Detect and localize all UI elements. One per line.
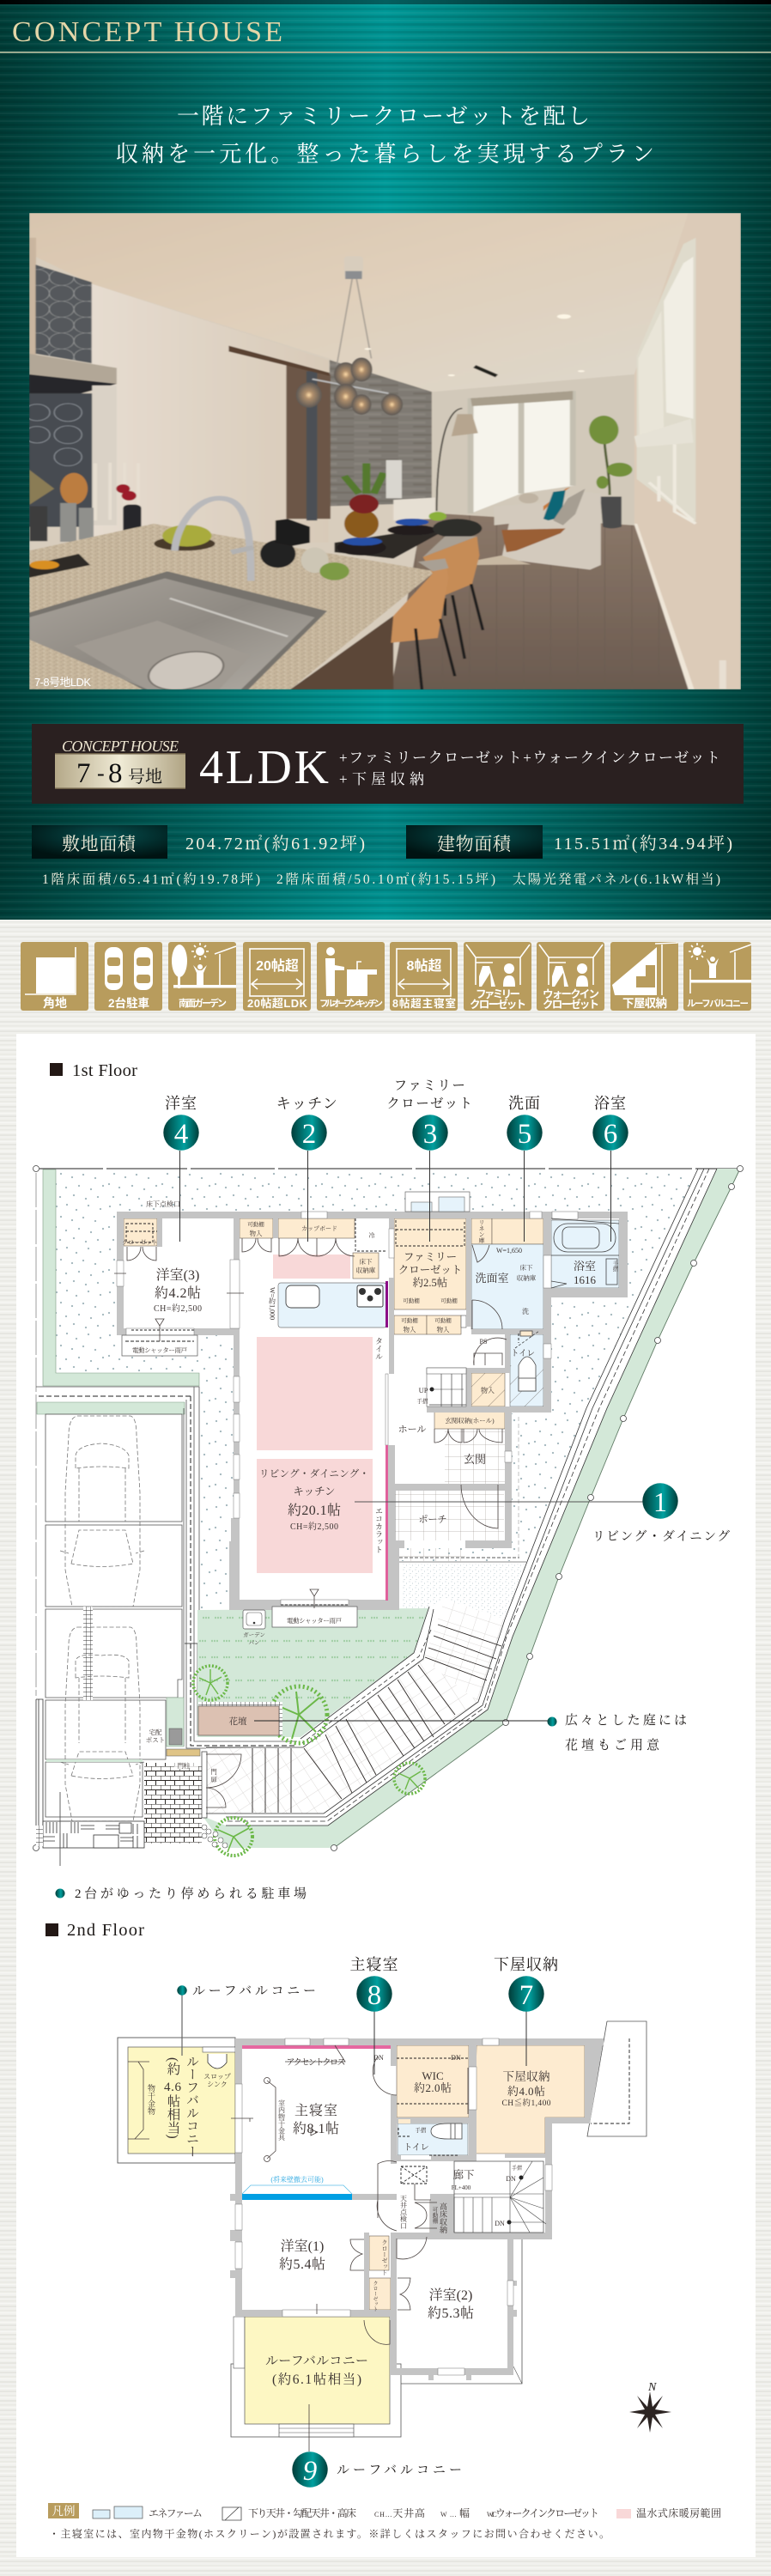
- gate pavers: 門柱: [177, 1761, 191, 1770]
- room labels: 玄関収納(ホール): [445, 1416, 495, 1425]
- stairs: [454, 2161, 546, 2233]
- callout 9: ルーフバルコニー: ルーフバルコニー: [337, 2464, 462, 2477]
- callout 2: キッチン: [276, 1096, 338, 1242]
- callout 2: キッチン: 2: [302, 1119, 316, 1150]
- icon: family closet: ファミリー: [476, 988, 520, 1000]
- room fills: [124, 1218, 619, 1429]
- label: building area: [406, 825, 543, 859]
- garden pan: パン: [249, 1639, 259, 1646]
- heading: 2nd Floor: 2nd Floor: [67, 1921, 144, 1940]
- text: floor areas and solar: [42, 872, 720, 887]
- callout 7: 下屋収納: [494, 1956, 559, 2066]
- callout 7: 下屋収納: 7: [519, 1980, 533, 2011]
- badge: lot number: [55, 753, 185, 789]
- icon: corner lot: [21, 942, 88, 1011]
- site: approach path: [206, 1169, 717, 1826]
- icon: LDK over 20 tatami: 20帖超: [256, 958, 299, 974]
- gate pavers: [144, 1761, 202, 1844]
- room labels: 1616: [574, 1273, 596, 1286]
- callout 5: 洗面: 5: [518, 1119, 531, 1150]
- room labels: 可動棚: [247, 1220, 264, 1228]
- vertical labels: [276, 2099, 447, 2312]
- icon: south garden: [168, 942, 236, 1011]
- label: concept house: CONCEPT HOUSE: [62, 738, 179, 755]
- vertical labels: リネン庫: [478, 1219, 485, 1244]
- room labels: 可動棚: [440, 1297, 458, 1304]
- icon: walk-in closet: クローゼット: [543, 998, 599, 1011]
- outer eave: [587, 2021, 647, 2136]
- site: lawn: [197, 1608, 428, 1737]
- room labels: PS: [480, 1338, 487, 1346]
- room labels: 約5.3帖: [428, 2306, 474, 2321]
- badge: lot number: 7: [76, 758, 91, 789]
- site: boundary markers: [33, 1166, 744, 1851]
- trees: [193, 1666, 425, 1856]
- icon: walk-in closet: ウォークイン: [543, 988, 599, 1000]
- vertical labels: クローゼット: [381, 2239, 388, 2275]
- gate: 扉: [210, 1776, 217, 1783]
- icon: family closet: クローゼット: [470, 998, 526, 1011]
- room labels: 約4.0帖: [507, 2085, 545, 2098]
- callouts: first floor: [55, 1078, 730, 1901]
- pendant lamp: [344, 256, 363, 278]
- gate: 門: [210, 1768, 217, 1776]
- room labels: CH=約2,500: [154, 1303, 202, 1314]
- callout 7: 下屋収納: 下屋収納: [494, 1956, 559, 1973]
- lower roof balcony: (約6.1帖相当): [272, 2372, 361, 2387]
- room labels: 下屋収納: [503, 2070, 549, 2083]
- triangle marks: [114, 1273, 319, 1608]
- room labels: ファミリー: [404, 1251, 457, 1263]
- floor lamp: [437, 409, 462, 511]
- room labels: CH=約2,500: [290, 1521, 338, 1532]
- room labels: 洋室(3): [156, 1267, 199, 1283]
- callout 6: 浴室: [592, 1095, 628, 1242]
- callout 4: 洋室: 4: [174, 1119, 188, 1150]
- room labels: 洋室(2): [429, 2287, 472, 2303]
- room labels: リビング・ダイニング・: [259, 1468, 369, 1479]
- room labels: 洋室(1): [281, 2239, 324, 2254]
- rain shutters: 電動シャッター雨戸: [287, 1616, 342, 1625]
- callout 1: リビング・ダイニング: [355, 1483, 730, 1544]
- room labels: ポーチ: [419, 1514, 446, 1525]
- outdoor unit: [405, 1192, 470, 1212]
- eave lower right: [401, 2239, 522, 2384]
- room labels: 可動棚: [401, 1316, 418, 1324]
- garden pan: ガーデン: [243, 1631, 265, 1638]
- room labels: 約5.4帖: [279, 2257, 325, 2272]
- lower roof balcony: [231, 2317, 401, 2437]
- balcony: upper roof balcony: ルーフバルコニー: [185, 2055, 199, 2158]
- vertical labels: W=約1,000: [268, 1287, 276, 1320]
- icon: bedroom over 8 tatami: [390, 942, 458, 1011]
- room labels: 物入: [481, 1386, 495, 1394]
- walls: [230, 2038, 604, 2380]
- callout 6: 浴室: 6: [604, 1119, 617, 1150]
- panel: floor plan white card: [16, 1034, 756, 2557]
- badge: lot number: 号地: [128, 767, 162, 787]
- room labels: [270, 2054, 551, 2321]
- entrance tiles: [445, 1429, 505, 1484]
- room labels: 床下: [359, 1257, 373, 1266]
- legend: [48, 2503, 721, 2520]
- room labels: ホール: [398, 1425, 426, 1435]
- legend: WIC ウォークインクローゼット: [487, 2507, 599, 2519]
- icon: open kitchen: [317, 942, 385, 1011]
- stones: [202, 1825, 228, 1848]
- callout 8: 主寝室: [350, 1956, 398, 2075]
- photo caption: 7-8号地LDK: [34, 676, 91, 689]
- room labels: 浴室: [574, 1260, 596, 1273]
- text: floor areas and solar: 太陽光発電パネル(6.1kW相当): [513, 872, 720, 887]
- callout: flower bed garden: 広々とした庭には: [565, 1713, 687, 1728]
- stairs: UP: [419, 1386, 428, 1394]
- balcony: upper roof balcony: スロップ: [203, 2073, 231, 2081]
- rooms: [242, 2045, 585, 2310]
- layout: 4LDK: 4LDK: [199, 741, 329, 794]
- room labels: キッチン: [293, 1485, 336, 1498]
- callout 2: キッチン: キッチン: [276, 1096, 338, 1112]
- kitchen counter: [278, 1283, 386, 1327]
- lower roof balcony: ルーフバルコニー: [265, 2354, 368, 2368]
- parking: paver strip: [83, 1607, 93, 1700]
- sofa: [495, 492, 601, 570]
- icon: corner lot: 角地: [43, 996, 67, 1010]
- icon: roof balcony: [683, 942, 751, 1011]
- label: building area: 建物面積: [437, 834, 513, 854]
- room: floor heating: [257, 1255, 373, 1573]
- value: building area: 115.51㎡(約34.94坪): [554, 834, 732, 854]
- building: first floor: [114, 1192, 628, 1646]
- callout: roof balcony upper: ルーフバルコニー: [192, 1984, 316, 1998]
- room labels: 床下: [520, 1263, 533, 1272]
- icon: north compass: [629, 2381, 671, 2433]
- room labels: アクセントクロス: [287, 2057, 345, 2068]
- vertical labels: [268, 1219, 618, 1553]
- balcony: upper roof balcony: 帖相当): [165, 2094, 180, 2139]
- site: property lines: [39, 1168, 738, 1170]
- vertical labels: クローゼット: [372, 2280, 378, 2312]
- panel: teal hero background: [0, 0, 771, 920]
- room labels: 物入: [249, 1229, 263, 1237]
- callout 5: 洗面: [507, 1095, 543, 1242]
- room labels: W=1,650: [496, 1247, 522, 1255]
- windows: [117, 1212, 578, 1605]
- stairs: 手摺: [417, 1397, 428, 1405]
- callout 5: 洗面: 洗面: [508, 1095, 541, 1112]
- legend: 下り天井・勾配天井・高床: [248, 2506, 356, 2519]
- room labels: 約2.0帖: [414, 2081, 452, 2094]
- balcony: upper roof balcony: 4.6: [164, 2081, 182, 2094]
- callout 3: ファミリークローゼット: 3: [423, 1119, 437, 1150]
- callout 9: ルーフバルコニー: 9: [303, 2456, 317, 2487]
- vertical labels: エコカラット: [374, 1507, 383, 1553]
- flower bed: [198, 1702, 282, 1735]
- room labels: 物入: [436, 1325, 450, 1334]
- vertical labels: タイル: [374, 1337, 383, 1360]
- room labels: クローゼット: [398, 1264, 462, 1276]
- callout 1: リビング・ダイニング: リビング・ダイニング: [592, 1529, 730, 1544]
- legend title: [48, 2503, 79, 2518]
- icon: LDK over 20 tatami: 20帖超LDK: [247, 997, 308, 1010]
- room labels: 主寝室: [294, 2102, 337, 2118]
- icon: open kitchen: フルオープンキッチン: [319, 999, 383, 1009]
- room labels: DN: [451, 2054, 461, 2062]
- callout 3: ファミリークローゼット: [386, 1078, 474, 1242]
- stairs: [417, 1368, 466, 1406]
- rain shutters: 電動シャッター雨戸: [132, 1346, 187, 1354]
- icon: bedroom over 8 tatami: 8帖超: [407, 958, 441, 974]
- rain shutters: [122, 1335, 357, 1627]
- floor plan: first floor: [33, 1166, 744, 1856]
- room labels: 収納庫: [356, 1266, 376, 1274]
- room labels: 床下点検口: [146, 1200, 180, 1208]
- label: site area: [32, 825, 167, 859]
- room labels: クローゼット: [122, 1239, 158, 1246]
- room labels: [122, 1200, 596, 1532]
- icon: roof balcony: ルーフバルコニー: [687, 999, 749, 1009]
- doors: [127, 1238, 507, 1528]
- room labels: 約2.5帖: [413, 1276, 447, 1289]
- callout 6: 浴室: 浴室: [594, 1095, 627, 1112]
- legend: エネファーム: [149, 2507, 203, 2519]
- stairs: DN: [506, 2175, 516, 2183]
- stairs: 手摺: [512, 2165, 522, 2172]
- legend: CH…天井高: [374, 2506, 425, 2519]
- room labels: 洗: [522, 1307, 529, 1315]
- side windows: [637, 238, 695, 524]
- balcony: upper roof balcony: [118, 2038, 235, 2163]
- icon: attic storage: 下屋収納: [622, 996, 667, 1010]
- text: plan additions: +ファミリークローゼット+ウォークインクローゼット: [339, 750, 720, 766]
- delivery box: ポスト: [146, 1736, 165, 1744]
- stairs: DN: [495, 2220, 505, 2227]
- toilet: [515, 1331, 539, 1391]
- icon: walk-in closet: [537, 942, 604, 1011]
- callout: parking: 2台がゆったり停められる駐車場: [75, 1886, 307, 1901]
- callout 8: 主寝室: 8: [367, 1980, 381, 2011]
- driveway pattern: [43, 1821, 144, 1848]
- icon: attic storage: [610, 942, 678, 1011]
- flower bed: 花壇: [228, 1716, 247, 1727]
- room labels: 手摺: [416, 2126, 427, 2134]
- site: gravel ground: [56, 1169, 698, 1610]
- parking: side line: [36, 1699, 43, 1826]
- icon: family closet: [464, 942, 531, 1011]
- text: plan additions: +下屋収納: [339, 771, 424, 787]
- room labels: 収納庫: [517, 1273, 537, 1282]
- site: east planting strip: [203, 1169, 740, 1848]
- legend title: 凡例: [52, 2505, 76, 2518]
- room labels: 約20.1帖: [288, 1503, 341, 1518]
- room labels: CH≦約1,400: [501, 2098, 551, 2108]
- room labels: (将来壁撤去可能): [270, 2175, 324, 2184]
- room labels: カップボード: [301, 1225, 337, 1232]
- dining table: [335, 524, 458, 559]
- icon: LDK over 20 tatami: [243, 942, 311, 1011]
- balcony: upper roof balcony: シンク: [207, 2081, 228, 2088]
- value: site area: 204.72㎡(約61.92坪): [185, 834, 365, 854]
- room labels: DN: [373, 2054, 384, 2062]
- fixtures: [231, 2045, 469, 2451]
- heading: 1st Floor: 1st Floor: [72, 1061, 137, 1080]
- legend: W… 幅: [440, 2506, 470, 2519]
- walls: [117, 1212, 628, 1610]
- note: ・主寝室には、室内物干金物(ホスクリーン)が設置されます。※詳しくはスタッフにお問い合わせください。: [49, 2527, 610, 2540]
- icon: two car parking: 2台駐車: [108, 996, 149, 1010]
- balcony: upper roof balcony: (約: [165, 2057, 180, 2075]
- room labels: 廊下: [452, 2168, 475, 2181]
- callout 3: ファミリークローゼット: ファミリー: [394, 1078, 466, 1093]
- counter: [29, 524, 435, 690]
- callout: flower bed garden: 花壇もご用意: [565, 1737, 660, 1753]
- room labels: 物入: [404, 1325, 416, 1334]
- callout 9: ルーフバルコニー: [292, 2451, 462, 2488]
- callout 8: 主寝室: 主寝室: [350, 1956, 398, 1973]
- room labels: 玄関: [464, 1453, 486, 1466]
- callout: flower bed garden: [254, 1713, 687, 1753]
- bathtub: [551, 1218, 619, 1288]
- title: plan headline: 一階にファミリークローゼットを配し: [177, 104, 590, 129]
- title: plan headline: [116, 104, 654, 167]
- gate: [202, 1752, 241, 1818]
- room labels: FL+400: [452, 2184, 471, 2191]
- text: floor areas and solar: 2階床面積/50.10㎡(約15.15坪): [276, 872, 495, 887]
- kitchen back: [29, 354, 117, 384]
- callout 4: 洋室: 洋室: [165, 1095, 197, 1112]
- badge: lot number: 8: [108, 758, 122, 789]
- room labels: WIC: [422, 2069, 444, 2082]
- panel: plan summary bar: [32, 724, 744, 804]
- icon: north compass: N: [647, 2381, 657, 2394]
- parking: car outlines: [60, 1416, 144, 1821]
- room labels: 約8.1帖: [293, 2121, 339, 2136]
- floor plan: second floor: [118, 2021, 647, 2451]
- title: plan headline: 収納を一元化。整った暮らしを実現するプラン: [116, 142, 654, 167]
- icon: bedroom over 8 tatami: 8帖超主寝室: [392, 997, 456, 1010]
- vertical labels: 天井点検口: [398, 2195, 407, 2230]
- heading: CONCEPT HOUSE: CONCEPT HOUSE: [12, 16, 282, 48]
- room labels: 約4.2帖: [155, 1285, 201, 1301]
- room labels: 冷: [369, 1231, 374, 1239]
- vertical labels: 室内物干金具: [276, 2099, 285, 2142]
- callout 4: 洋室: [163, 1095, 199, 1242]
- delivery box: [146, 1698, 184, 1747]
- icon: south garden: 南面ガーデン: [179, 997, 227, 1009]
- callout: parking: [55, 1792, 307, 1901]
- icon: two car parking: [94, 942, 162, 1011]
- badge: lot number: -: [97, 761, 105, 786]
- vertical labels: 高床収納: [439, 2202, 447, 2234]
- text: plan additions: [339, 750, 720, 787]
- delivery box: 宅配: [149, 1728, 162, 1736]
- room labels: トイレ: [511, 1349, 535, 1358]
- plant: [601, 496, 622, 528]
- photo: LDK interior: [29, 213, 741, 690]
- label: site area: 敷地面積: [62, 834, 137, 854]
- site: hedge planting left: [43, 1170, 199, 1386]
- parking: slab outlines: [46, 1414, 182, 1817]
- balcony: upper roof balcony: 物干金物: [147, 2083, 155, 2116]
- vertical labels: 手摺: [611, 1260, 618, 1273]
- icons: feature row: [21, 942, 751, 1011]
- legend: 温水式床暖房範囲: [636, 2506, 721, 2519]
- windows: [235, 2038, 552, 2375]
- ceiling lights: [475, 367, 496, 376]
- text: floor areas and solar: 1階床面積/65.41㎡(約19.78坪): [42, 872, 260, 887]
- callout: roof balcony upper: [177, 1984, 316, 2056]
- callouts: second floor: [177, 1956, 559, 2488]
- room labels: 洗面室: [475, 1272, 509, 1285]
- chairs: [423, 537, 479, 595]
- vertical labels: 可動棚: [431, 2207, 438, 2225]
- callout 1: リビング・ダイニング: 1: [653, 1486, 667, 1517]
- room labels: 可動棚: [403, 1297, 420, 1304]
- room labels: 可動棚: [434, 1316, 452, 1324]
- room labels: トイレ: [404, 2142, 429, 2153]
- garden pan: [243, 1610, 265, 1646]
- callout 3: ファミリークローゼット: クローゼット: [386, 1097, 474, 1111]
